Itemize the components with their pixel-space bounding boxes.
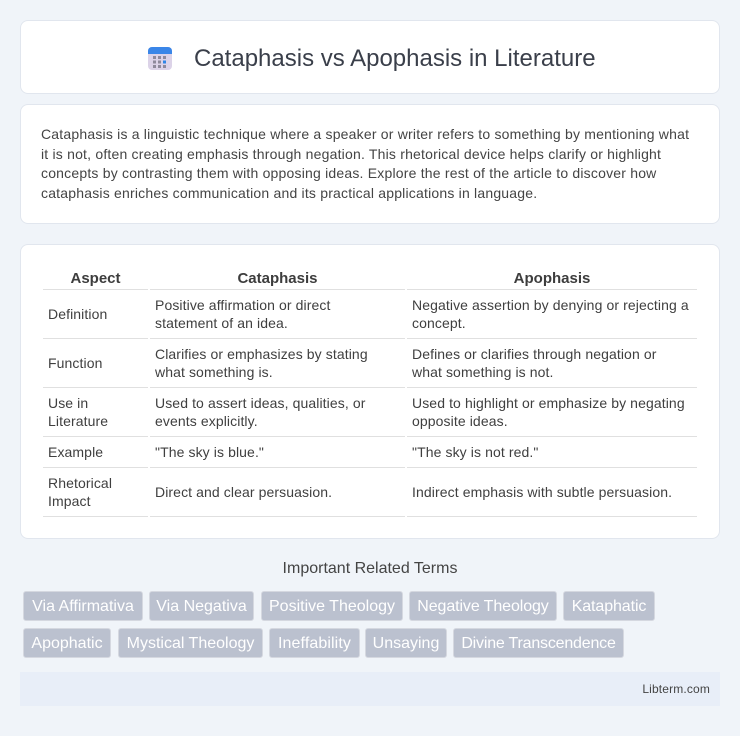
heading: related terms: Important Related Terms — [283, 560, 457, 577]
tag: Unsaying — [373, 635, 439, 652]
tag — [149, 591, 254, 621]
intro paragraph: Cataphasis is a linguistic technique where a speaker or writer refers to something by mentioning what — [41, 126, 689, 142]
row: definition: Positive affirmation or direct — [155, 297, 330, 313]
tag — [23, 628, 111, 658]
intro paragraph — [41, 126, 689, 201]
footer credit: Libterm.com — [642, 682, 710, 696]
tag — [563, 591, 655, 621]
footer bar — [20, 672, 720, 706]
tag — [269, 628, 360, 658]
row: example — [48, 444, 538, 460]
tag group: related terms — [23, 591, 655, 658]
row: use in literature: events explicitly. — [155, 413, 258, 429]
title: Cataphasis vs Apophasis in Literature — [194, 45, 596, 72]
row: example: Example — [48, 444, 103, 460]
intro paragraph: cataphasis enriches communication and its practical applications in language. — [41, 184, 537, 200]
row: use in literature: opposite ideas. — [412, 413, 508, 429]
tag: Kataphatic — [572, 598, 646, 615]
icon: calendar — [148, 47, 172, 70]
tag: Apophatic — [31, 635, 103, 652]
row: rhetorical impact — [48, 475, 672, 509]
row: function: what something is not. — [412, 364, 554, 380]
row: function: what something is. — [155, 364, 273, 380]
tag: Divine Transcendence — [461, 635, 616, 652]
panel: comparison table — [20, 244, 720, 539]
row: definition: statement of an idea. — [155, 315, 288, 331]
intro paragraph: concepts by contrasting them with opposing ideas. Explore the rest of the article to discover how — [41, 165, 656, 181]
intro paragraph: it is not, often creating emphasis through negation. This rhetorical device helps clarify or highlight — [41, 146, 661, 162]
tag: Ineffability — [278, 635, 351, 652]
row: function: Defines or clarifies through negation or — [412, 346, 656, 362]
row: rhetorical impact: Direct and clear persuasion. — [155, 484, 332, 500]
tag — [409, 591, 557, 621]
row: use in literature: Use in — [48, 395, 88, 411]
table header: Aspect — [70, 270, 121, 287]
row: example: "The sky is blue." — [155, 444, 264, 460]
tag: Mystical Theology — [127, 635, 254, 652]
row: rhetorical impact: Impact — [48, 493, 91, 509]
tag: Negative Theology — [417, 598, 549, 615]
row: function: Clarifies or emphasizes by stating — [155, 346, 368, 362]
row: use in literature — [48, 395, 685, 429]
panel: introduction text — [20, 104, 720, 224]
tag: Via Negativa — [156, 598, 247, 615]
table header: Cataphasis — [237, 270, 318, 287]
row: definition: concept. — [412, 315, 466, 331]
tag: Via Affirmativa — [32, 598, 134, 615]
tag: Positive Theology — [269, 598, 395, 615]
table header — [70, 270, 590, 287]
tag — [118, 628, 263, 658]
tag — [453, 628, 624, 658]
panel: title header — [20, 20, 720, 94]
tag — [365, 628, 447, 658]
row: rhetorical impact: Rhetorical — [48, 475, 112, 491]
row: definition: Negative assertion by denying or rejecting a — [412, 297, 689, 313]
row: rhetorical impact: Indirect emphasis with subtle persuasion. — [412, 484, 672, 500]
row: use in literature: Used to assert ideas, qualities, or — [155, 395, 366, 411]
table header: Apophasis — [514, 270, 590, 287]
row: function — [48, 346, 656, 380]
tag — [261, 591, 403, 621]
row: definition — [48, 297, 689, 331]
row: definition: Definition — [48, 306, 107, 322]
row: example: "The sky is not red." — [412, 444, 538, 460]
tag — [23, 591, 143, 621]
row: use in literature: Used to highlight or emphasize by negating — [412, 395, 685, 411]
row: use in literature: Literature — [48, 413, 108, 429]
row: function: Function — [48, 355, 102, 371]
